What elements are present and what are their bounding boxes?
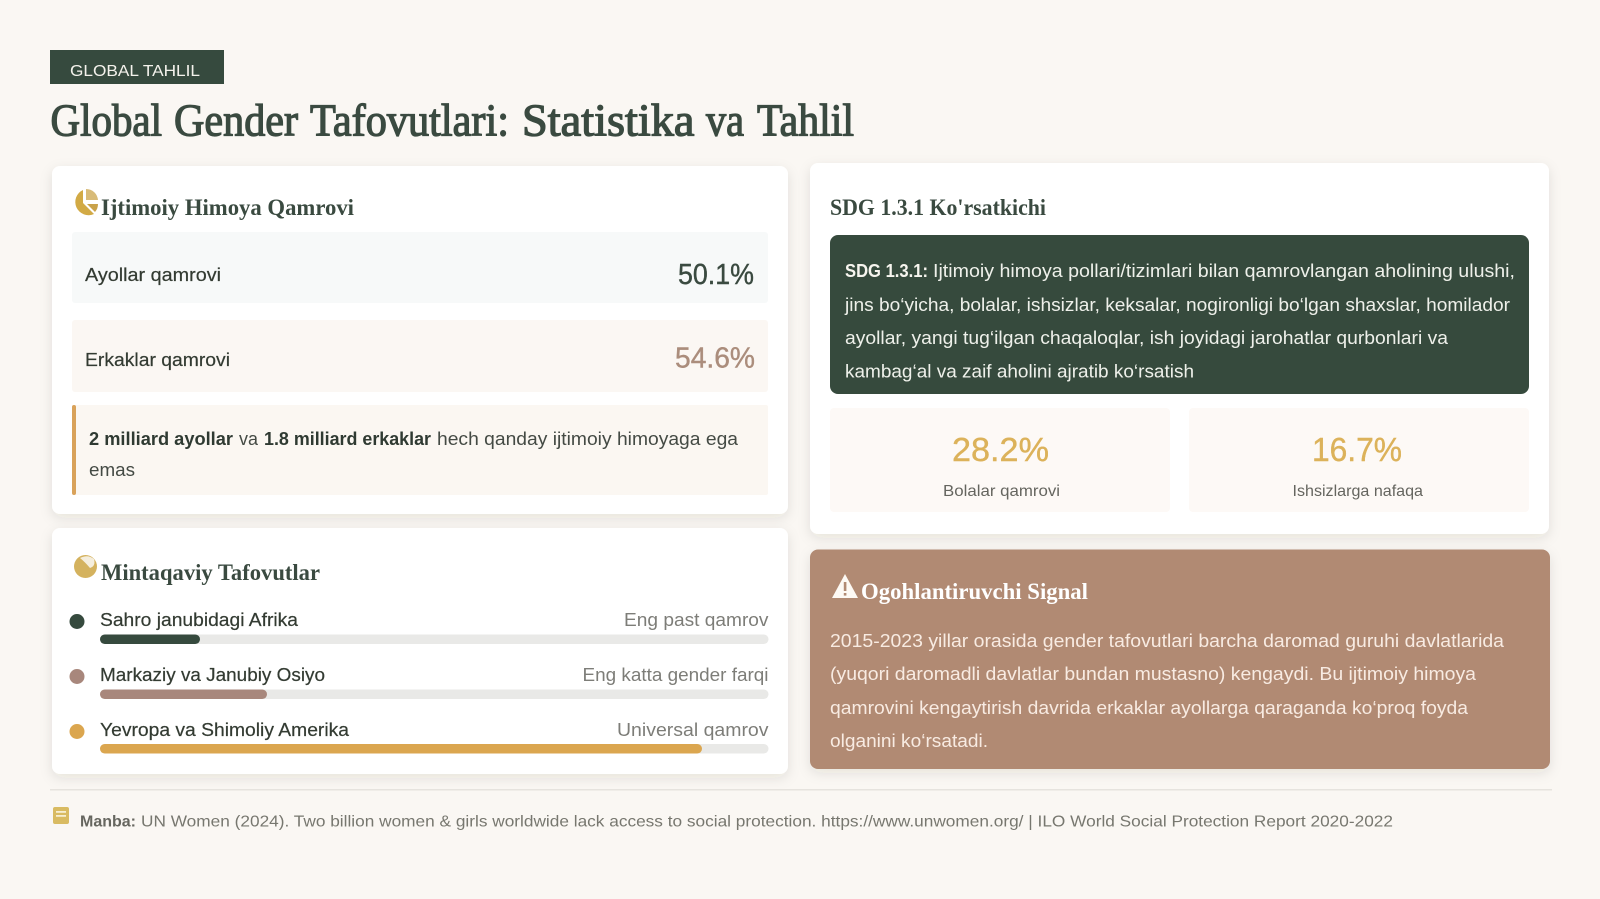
- stat card: unemployment benefit: [1189, 408, 1529, 512]
- definition box: [830, 235, 1529, 394]
- title: Tahlil: [757, 96, 854, 146]
- warning text: qamrovini kengaytirish davrida erkaklar ayollarga qaraganda ko‘proq foyda: [830, 698, 1469, 718]
- region: Central and South Asia: Eng katta gender farqi: [582, 665, 768, 685]
- title: va: [706, 96, 744, 146]
- definition box: ayollar, yangi tug‘ilgan chaqaloqlar, ish joyidagi jarohatlar qurbonlari va: [845, 328, 1449, 348]
- region: Europe and North America: [70, 720, 768, 754]
- panel: warning signal: [810, 550, 1550, 769]
- panel: regional gaps: [52, 528, 788, 774]
- icon: globe: [74, 555, 97, 578]
- source text: UN Women (2024). Two billion women & girls worldwide lack access to social protection. https://www.unwomen.org/ | ILO World Social Protection Report 2020-2022: [141, 814, 1393, 830]
- region: Sub-Saharan Africa: Sahro janubidagi Afrika: [100, 610, 299, 630]
- panel: SDG indicator: [810, 163, 1549, 534]
- title: Tafovutlari:: [310, 96, 509, 146]
- region: Sub-Saharan Africa: Eng past qamrov: [624, 610, 768, 630]
- heading: Ijtimoiy Himoya Qamrovi: [101, 195, 354, 221]
- title: Global: [50, 96, 162, 146]
- stat row: women coverage: [72, 232, 768, 303]
- region: Sub-Saharan Africa: [70, 610, 768, 644]
- region: Europe and North America: Universal qamrov: [617, 720, 768, 740]
- header badge: GLOBAL TAHLIL: [70, 63, 200, 80]
- panel: social protection coverage: [52, 166, 788, 514]
- warning text: (yuqori daromadli davlatlar bundan mustasno) kengaydi. Bu ijtimoiy himoya: [830, 664, 1477, 684]
- source footer: [53, 807, 1393, 830]
- heading: Ogohlantiruvchi Signal: [861, 579, 1088, 605]
- heading: SDG 1.3.1 Ko'rsatkichi: [830, 195, 1046, 221]
- stat row: men coverage: [72, 320, 768, 392]
- stat card: child coverage: [830, 408, 1170, 512]
- title: Gender: [174, 96, 298, 146]
- stat row: men coverage: Erkaklar qamrovi: [85, 350, 230, 370]
- region: Central and South Asia: [70, 665, 768, 699]
- stat card: child coverage: Bolalar qamrovi: [943, 483, 1060, 500]
- stat card: child coverage: 28.2%: [952, 431, 1049, 468]
- stat row: women coverage: Ayollar qamrovi: [85, 265, 221, 285]
- warning text: [830, 631, 1505, 751]
- title: Statistika: [522, 96, 695, 146]
- region: Central and South Asia: Markaziy va Janubiy Osiyo: [100, 665, 325, 685]
- warning text: olganini ko‘rsatadi.: [830, 731, 988, 751]
- icon: book: [53, 807, 69, 824]
- source text: Manba:: [80, 814, 136, 830]
- icon: warning triangle: [832, 574, 858, 598]
- callout: people without protection: emas: [89, 460, 135, 480]
- stat row: women coverage: 50.1%: [678, 259, 754, 291]
- warning text: 2015-2023 yillar orasida gender tafovutlari barcha daromad guruhi davlatlarida: [830, 631, 1505, 651]
- definition box: Ijtimoiy himoya pollari/tizimlari bilan qamrovlangan aholining ulushi,: [933, 261, 1515, 281]
- icon: pie chart: [75, 189, 98, 215]
- callout: people without protection: 2 milliard ayollar: [89, 429, 233, 449]
- callout: people without protection: hech qanday ijtimoiy himoyaga ega: [437, 429, 739, 449]
- stat card: unemployment benefit: 16.7%: [1312, 431, 1402, 468]
- callout: people without protection: va: [239, 429, 259, 449]
- definition box: jins bo‘yicha, bolalar, ishsizlar, keksalar, nogironligi bo‘lgan shaxslar, homilador: [844, 295, 1510, 315]
- header badge: [50, 50, 224, 84]
- heading: Mintaqaviy Tafovutlar: [101, 560, 320, 586]
- stat card: unemployment benefit: Ishsizlarga nafaqa: [1292, 483, 1423, 500]
- stat row: men coverage: 54.6%: [675, 342, 755, 374]
- title: [50, 96, 854, 146]
- definition box: kambag‘al va zaif aholini ajratib ko‘rsatish: [845, 362, 1194, 382]
- callout: people without protection: [72, 405, 768, 495]
- callout: people without protection: 1.8 milliard erkaklar: [264, 429, 431, 449]
- region: Europe and North America: Yevropa va Shimoliy Amerika: [100, 720, 350, 740]
- definition box: SDG 1.3.1:: [845, 261, 928, 281]
